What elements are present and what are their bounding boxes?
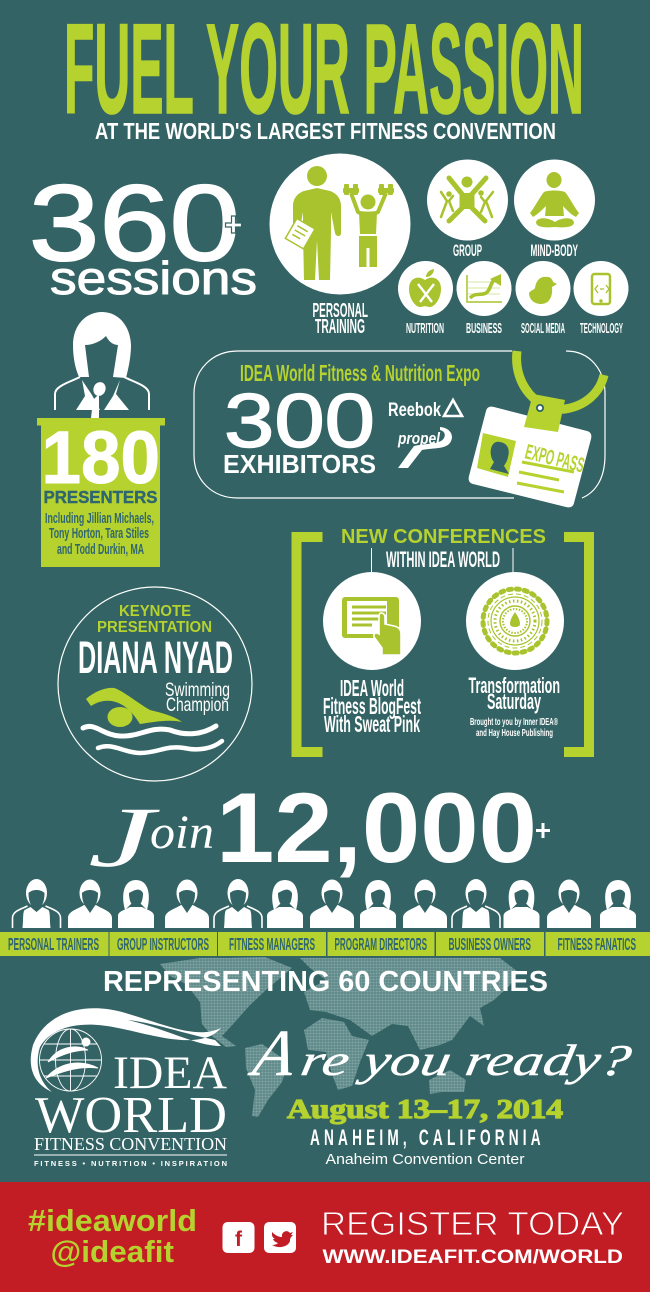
plus sign: [226, 216, 242, 233]
presenter names: Including Jillian Michaels,: [45, 511, 154, 527]
panel: new conferences: [292, 525, 594, 757]
icon: growth chart: [467, 274, 502, 302]
label: personal training: [312, 300, 368, 338]
stat: join 12,000+: [88, 772, 550, 885]
event date: August 13–17, 2014: [287, 1094, 563, 1124]
world map: [160, 957, 518, 1117]
are you ready script: A: [244, 1017, 302, 1090]
logo: propel: propel: [397, 429, 441, 448]
icon: child lifting dumbbells: [343, 184, 394, 267]
icon: facebook: [222, 1222, 254, 1253]
session type: business: [456, 261, 512, 337]
connector lines: [372, 548, 513, 573]
label: blogfest: IDEA World: [340, 675, 404, 701]
label: blogfest: [323, 675, 421, 737]
speaker name: DIANA NYAD: [78, 632, 233, 683]
audience category bands: FITNESS MANAGERS: [229, 934, 315, 954]
handle: @ideafit: [50, 1234, 174, 1269]
badge photo: [477, 433, 516, 477]
label: transformation: Brought to you by Inner IDEA®: [470, 717, 558, 728]
label: transformation: [468, 673, 560, 739]
icon: twitter: [264, 1222, 296, 1253]
number 12,000: 12,000: [216, 772, 537, 883]
session type: nutrition: [398, 261, 453, 337]
speaker role: Champion: [166, 695, 229, 716]
person 13: [600, 880, 636, 928]
person 6: [267, 880, 303, 928]
person 11: [504, 880, 540, 928]
person 4: [165, 880, 209, 928]
presenter names: and Todd Durkin, MA: [57, 542, 144, 558]
number 300: 300: [224, 379, 375, 464]
audience category bands: BUSINESS OWNERS: [448, 934, 531, 954]
badge lines: [517, 462, 574, 492]
session type: group: [427, 160, 508, 260]
session type: mind-body: MIND-BODY: [530, 241, 578, 260]
session type: personal training: [270, 154, 410, 338]
keynote outline: [58, 587, 252, 781]
person 7: [310, 880, 354, 928]
person 2: [68, 880, 112, 928]
podium top: [37, 418, 165, 426]
keynote heading: [97, 603, 212, 636]
plus sign: [536, 823, 550, 838]
website: WWW.IDEAFIT.COM/WORLD: [322, 1247, 623, 1268]
icon: bird: [529, 277, 557, 304]
transformation circle: [466, 572, 564, 739]
session type: social media: [516, 261, 570, 337]
audience category bands: GROUP INSTRUCTORS: [117, 934, 209, 954]
heading: NEW CONFERENCES: [341, 525, 546, 548]
icon: swimmer: [83, 688, 222, 753]
presenters word: PRESENTERS: [44, 487, 158, 507]
hashtag: #ideaworld: [28, 1203, 197, 1238]
rule: [34, 1154, 227, 1156]
lanyard: [517, 351, 604, 409]
person 12: [547, 880, 591, 928]
person 3: [118, 880, 154, 928]
icon: presenter silhouette: [55, 312, 149, 418]
icon: mandala: [483, 589, 547, 653]
stat: 360+ sessions: [29, 162, 257, 304]
label: personal training: TRAINING: [315, 316, 365, 338]
right bracket: [564, 532, 594, 757]
band segments: [0, 932, 650, 956]
speaker role: Swimming: [165, 680, 230, 701]
expo outline: [194, 351, 605, 498]
panel: expo: [194, 351, 605, 507]
icon: tablet and hand: [342, 597, 401, 655]
sessions word: sessions: [50, 252, 257, 304]
number 360: 360: [29, 162, 240, 283]
presenter names: Tony Horton, Tara Stiles: [49, 526, 149, 542]
event city: ANAHEIM, CALIFORNIA: [310, 1125, 541, 1150]
event venue: Anaheim Convention Center: [326, 1151, 524, 1168]
join script: oin: [150, 806, 214, 859]
person 1: [12, 879, 60, 928]
swoosh: [31, 1008, 221, 1092]
person 10: [452, 879, 500, 928]
text: SOCIAL MEDIA: [521, 321, 565, 337]
badge clip: [524, 394, 565, 432]
session type: group: GROUP: [453, 241, 482, 260]
icon: meditation: [530, 172, 579, 227]
stat: 180 presenters at podium: [37, 312, 165, 567]
audience category bands: [0, 932, 650, 956]
label: blogfest: With Sweat Pink: [324, 711, 420, 737]
session type: nutrition: NUTRITION: [406, 321, 444, 337]
expo heading: IDEA World Fitness & Nutrition Expo: [240, 360, 480, 386]
session type: technology: [574, 261, 628, 337]
globe: [40, 1029, 102, 1091]
footer band: [0, 1182, 650, 1292]
are you ready script: re you ready?: [297, 1035, 635, 1085]
icon: apple: [409, 269, 441, 307]
session type: personal training: PERSONAL: [312, 300, 368, 322]
audience category bands: PERSONAL TRAINERS: [8, 934, 99, 954]
heading: representing 60 countries: REPRESENTING 60 COUNTRIES: [103, 966, 548, 998]
subheading: WITHIN IDEA WORLD: [386, 547, 500, 572]
panel: keynote: [58, 587, 252, 781]
exhibitors word: EXHIBITORS: [223, 449, 376, 479]
icon: facebook: f: [235, 1228, 243, 1251]
person 9: [403, 880, 447, 928]
wordmark fitness convention: FITNESS CONVENTION: [34, 1134, 227, 1154]
podium body: [41, 425, 160, 567]
icon: group exercise: [441, 176, 493, 221]
presenter names: [45, 511, 154, 558]
label: blogfest: Fitness BlogFest: [323, 693, 421, 719]
session type: mind-body: [514, 160, 595, 260]
join script: [88, 789, 214, 885]
speaker role: [165, 680, 230, 716]
person 5: [214, 879, 262, 928]
expo pass badge: [469, 394, 591, 507]
label: transformation: and Hay House Publishing: [476, 728, 553, 739]
left bracket: [292, 532, 322, 757]
wordmark WORLD: WORLD: [35, 1087, 227, 1144]
person 8: [360, 880, 396, 928]
label: transformation: Transformation: [468, 673, 560, 698]
wordmark IDEA: IDEA: [113, 1047, 227, 1099]
session type: business: BUSINESS: [466, 321, 502, 337]
logo: Reebok: Reebok: [388, 400, 441, 421]
number 180: 180: [42, 416, 160, 499]
blogfest circle: [323, 572, 421, 737]
logo: IDEA World: [31, 1008, 227, 1168]
tagline: FITNESS • NUTRITION • INSPIRATION: [34, 1159, 227, 1168]
badge text: EXPO PASS: [523, 441, 587, 477]
join script: J: [88, 789, 161, 885]
label: transformation: Saturday: [487, 689, 541, 714]
audience category bands: PROGRAM DIRECTORS: [334, 934, 427, 954]
row of attendee icons: [12, 879, 636, 928]
icon: trainer: [285, 166, 341, 280]
keynote heading: PRESENTATION: [97, 619, 212, 636]
logo: propel: [397, 427, 452, 468]
call to action: REGISTER TODAY: [321, 1206, 624, 1243]
keynote heading: KEYNOTE: [119, 603, 191, 620]
icon: phone: [592, 274, 610, 304]
